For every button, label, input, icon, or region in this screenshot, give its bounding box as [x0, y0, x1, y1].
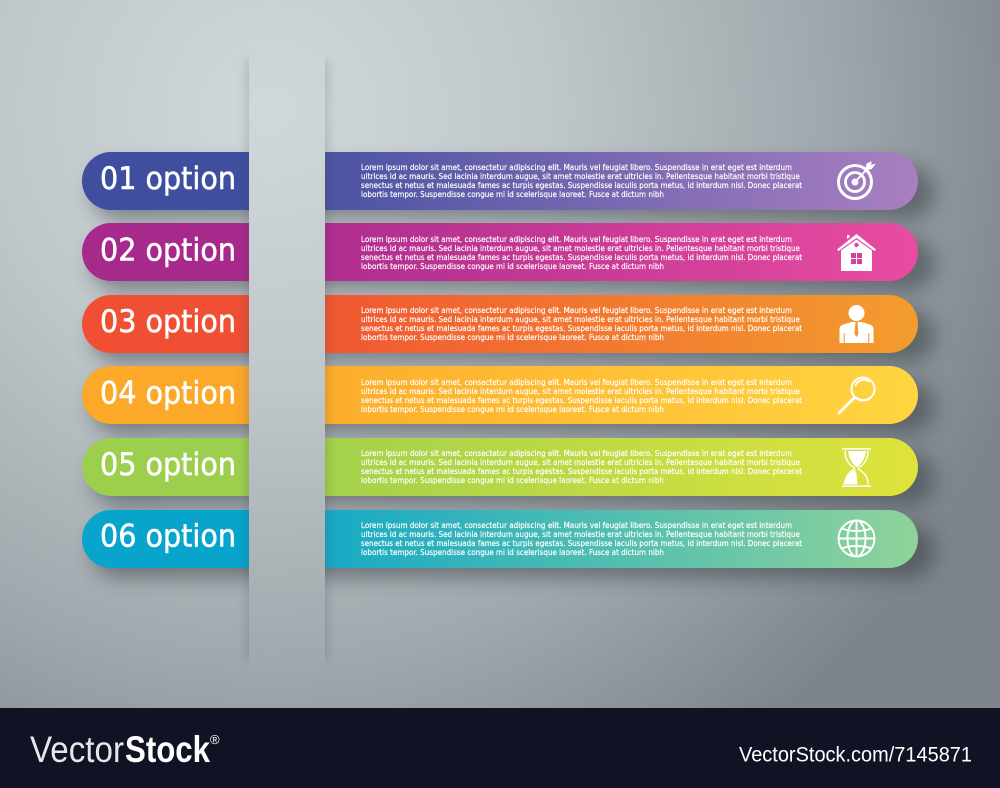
bar 02: 02 option	[100, 232, 236, 268]
bar 05	[82, 438, 935, 506]
bar 05: Lorem ipsum dolor sit amet, consectetur adipiscing elit. Mauris vel feugiat libero. Suspendisse in erat eget est interdum	[361, 449, 792, 458]
icon: globe	[838, 520, 874, 556]
bar 05: 05 option	[100, 447, 236, 483]
bar 02: lobortis tempor. Suspendisse congue mi id scelerisque laoreet. Fusce at dictum nibh	[361, 262, 664, 271]
bar 02: Lorem ipsum dolor sit amet, consectetur adipiscing elit. Mauris vel feugiat libero. Suspendisse in erat eget est interdum	[361, 235, 792, 244]
bar 06: lobortis tempor. Suspendisse congue mi id scelerisque laoreet. Fusce at dictum nibh	[361, 548, 664, 557]
bar 06: ultrices id ac mauris. Sed lacinia interdum augue, sit amet molestie erat ultricies in. Pellentesque habitant morbi tristique	[361, 530, 800, 539]
bar 02: ultrices id ac mauris. Sed lacinia interdum augue, sit amet molestie erat ultricies in. Pellentesque habitant morbi tristique	[361, 244, 800, 253]
panel: option bars	[82, 152, 935, 578]
bar 01: 01 option	[100, 161, 236, 197]
footer logo	[30, 729, 220, 770]
bar 05: senectus et netus et malesuada fames ac turpis egestas. Suspendisse iaculis porta metus, id interdum nisl. Donec placerat	[361, 467, 802, 476]
bar 01: Lorem ipsum dolor sit amet, consectetur adipiscing elit. Mauris vel feugiat libero. Suspendisse in erat eget est interdum	[361, 163, 792, 172]
bar 06: 06 option	[100, 518, 236, 554]
icon: hourglass	[842, 448, 871, 487]
bar 03: Lorem ipsum dolor sit amet, consectetur adipiscing elit. Mauris vel feugiat libero. Suspendisse in erat eget est interdum	[361, 306, 792, 315]
bar 04: senectus et netus et malesuada fames ac turpis egestas. Suspendisse iaculis porta metus, id interdum nisl. Donec placerat	[361, 396, 802, 405]
bar 05: ultrices id ac mauris. Sed lacinia interdum augue, sit amet molestie erat ultricies in. Pellentesque habitant morbi tristique	[361, 458, 800, 467]
bar 04: Lorem ipsum dolor sit amet, consectetur adipiscing elit. Mauris vel feugiat libero. Suspendisse in erat eget est interdum	[361, 378, 792, 387]
bar 01	[82, 152, 935, 220]
bar 02	[82, 223, 935, 291]
bar 04	[82, 366, 935, 434]
bar 06: Lorem ipsum dolor sit amet, consectetur adipiscing elit. Mauris vel feugiat libero. Suspendisse in erat eget est interdum	[361, 521, 792, 530]
bar 04: lobortis tempor. Suspendisse congue mi id scelerisque laoreet. Fusce at dictum nibh	[361, 405, 664, 414]
bar 02: senectus et netus et malesuada fames ac turpis egestas. Suspendisse iaculis porta metus, id interdum nisl. Donec placerat	[361, 253, 802, 262]
bar 01: senectus et netus et malesuada fames ac turpis egestas. Suspendisse iaculis porta metus, id interdum nisl. Donec placerat	[361, 181, 802, 190]
bar 03: senectus et netus et malesuada fames ac turpis egestas. Suspendisse iaculis porta metus, id interdum nisl. Donec placerat	[361, 324, 802, 333]
bar 03: lobortis tempor. Suspendisse congue mi id scelerisque laoreet. Fusce at dictum nibh	[361, 333, 664, 342]
icon: person	[840, 305, 874, 343]
bar 03: ultrices id ac mauris. Sed lacinia interdum augue, sit amet molestie erat ultricies in. Pellentesque habitant morbi tristique	[361, 315, 800, 324]
footer band	[0, 708, 1000, 788]
footer logo: Stock	[125, 729, 210, 770]
footer image id: VectorStock.com/7145871	[739, 744, 972, 766]
icon: magnifier	[839, 378, 874, 413]
bar 01: lobortis tempor. Suspendisse congue mi id scelerisque laoreet. Fusce at dictum nibh	[361, 190, 664, 199]
bar 03	[82, 295, 935, 363]
panel: vertical paper strip	[246, 20, 328, 690]
icon: target	[838, 162, 874, 198]
footer logo: Vector	[30, 729, 124, 770]
bar 05: lobortis tempor. Suspendisse congue mi id scelerisque laoreet. Fusce at dictum nibh	[361, 476, 664, 485]
bar 04: 04 option	[100, 376, 236, 412]
bar 06: senectus et netus et malesuada fames ac turpis egestas. Suspendisse iaculis porta metus, id interdum nisl. Donec placerat	[361, 539, 802, 548]
bar 04: ultrices id ac mauris. Sed lacinia interdum augue, sit amet molestie erat ultricies in. Pellentesque habitant morbi tristique	[361, 387, 800, 396]
bar 03: 03 option	[100, 304, 236, 340]
footer logo: ®	[210, 732, 220, 747]
icon: house	[837, 234, 876, 271]
bar 06	[82, 510, 935, 578]
bar 01: ultrices id ac mauris. Sed lacinia interdum augue, sit amet molestie erat ultricies in. Pellentesque habitant morbi tristique	[361, 172, 800, 181]
